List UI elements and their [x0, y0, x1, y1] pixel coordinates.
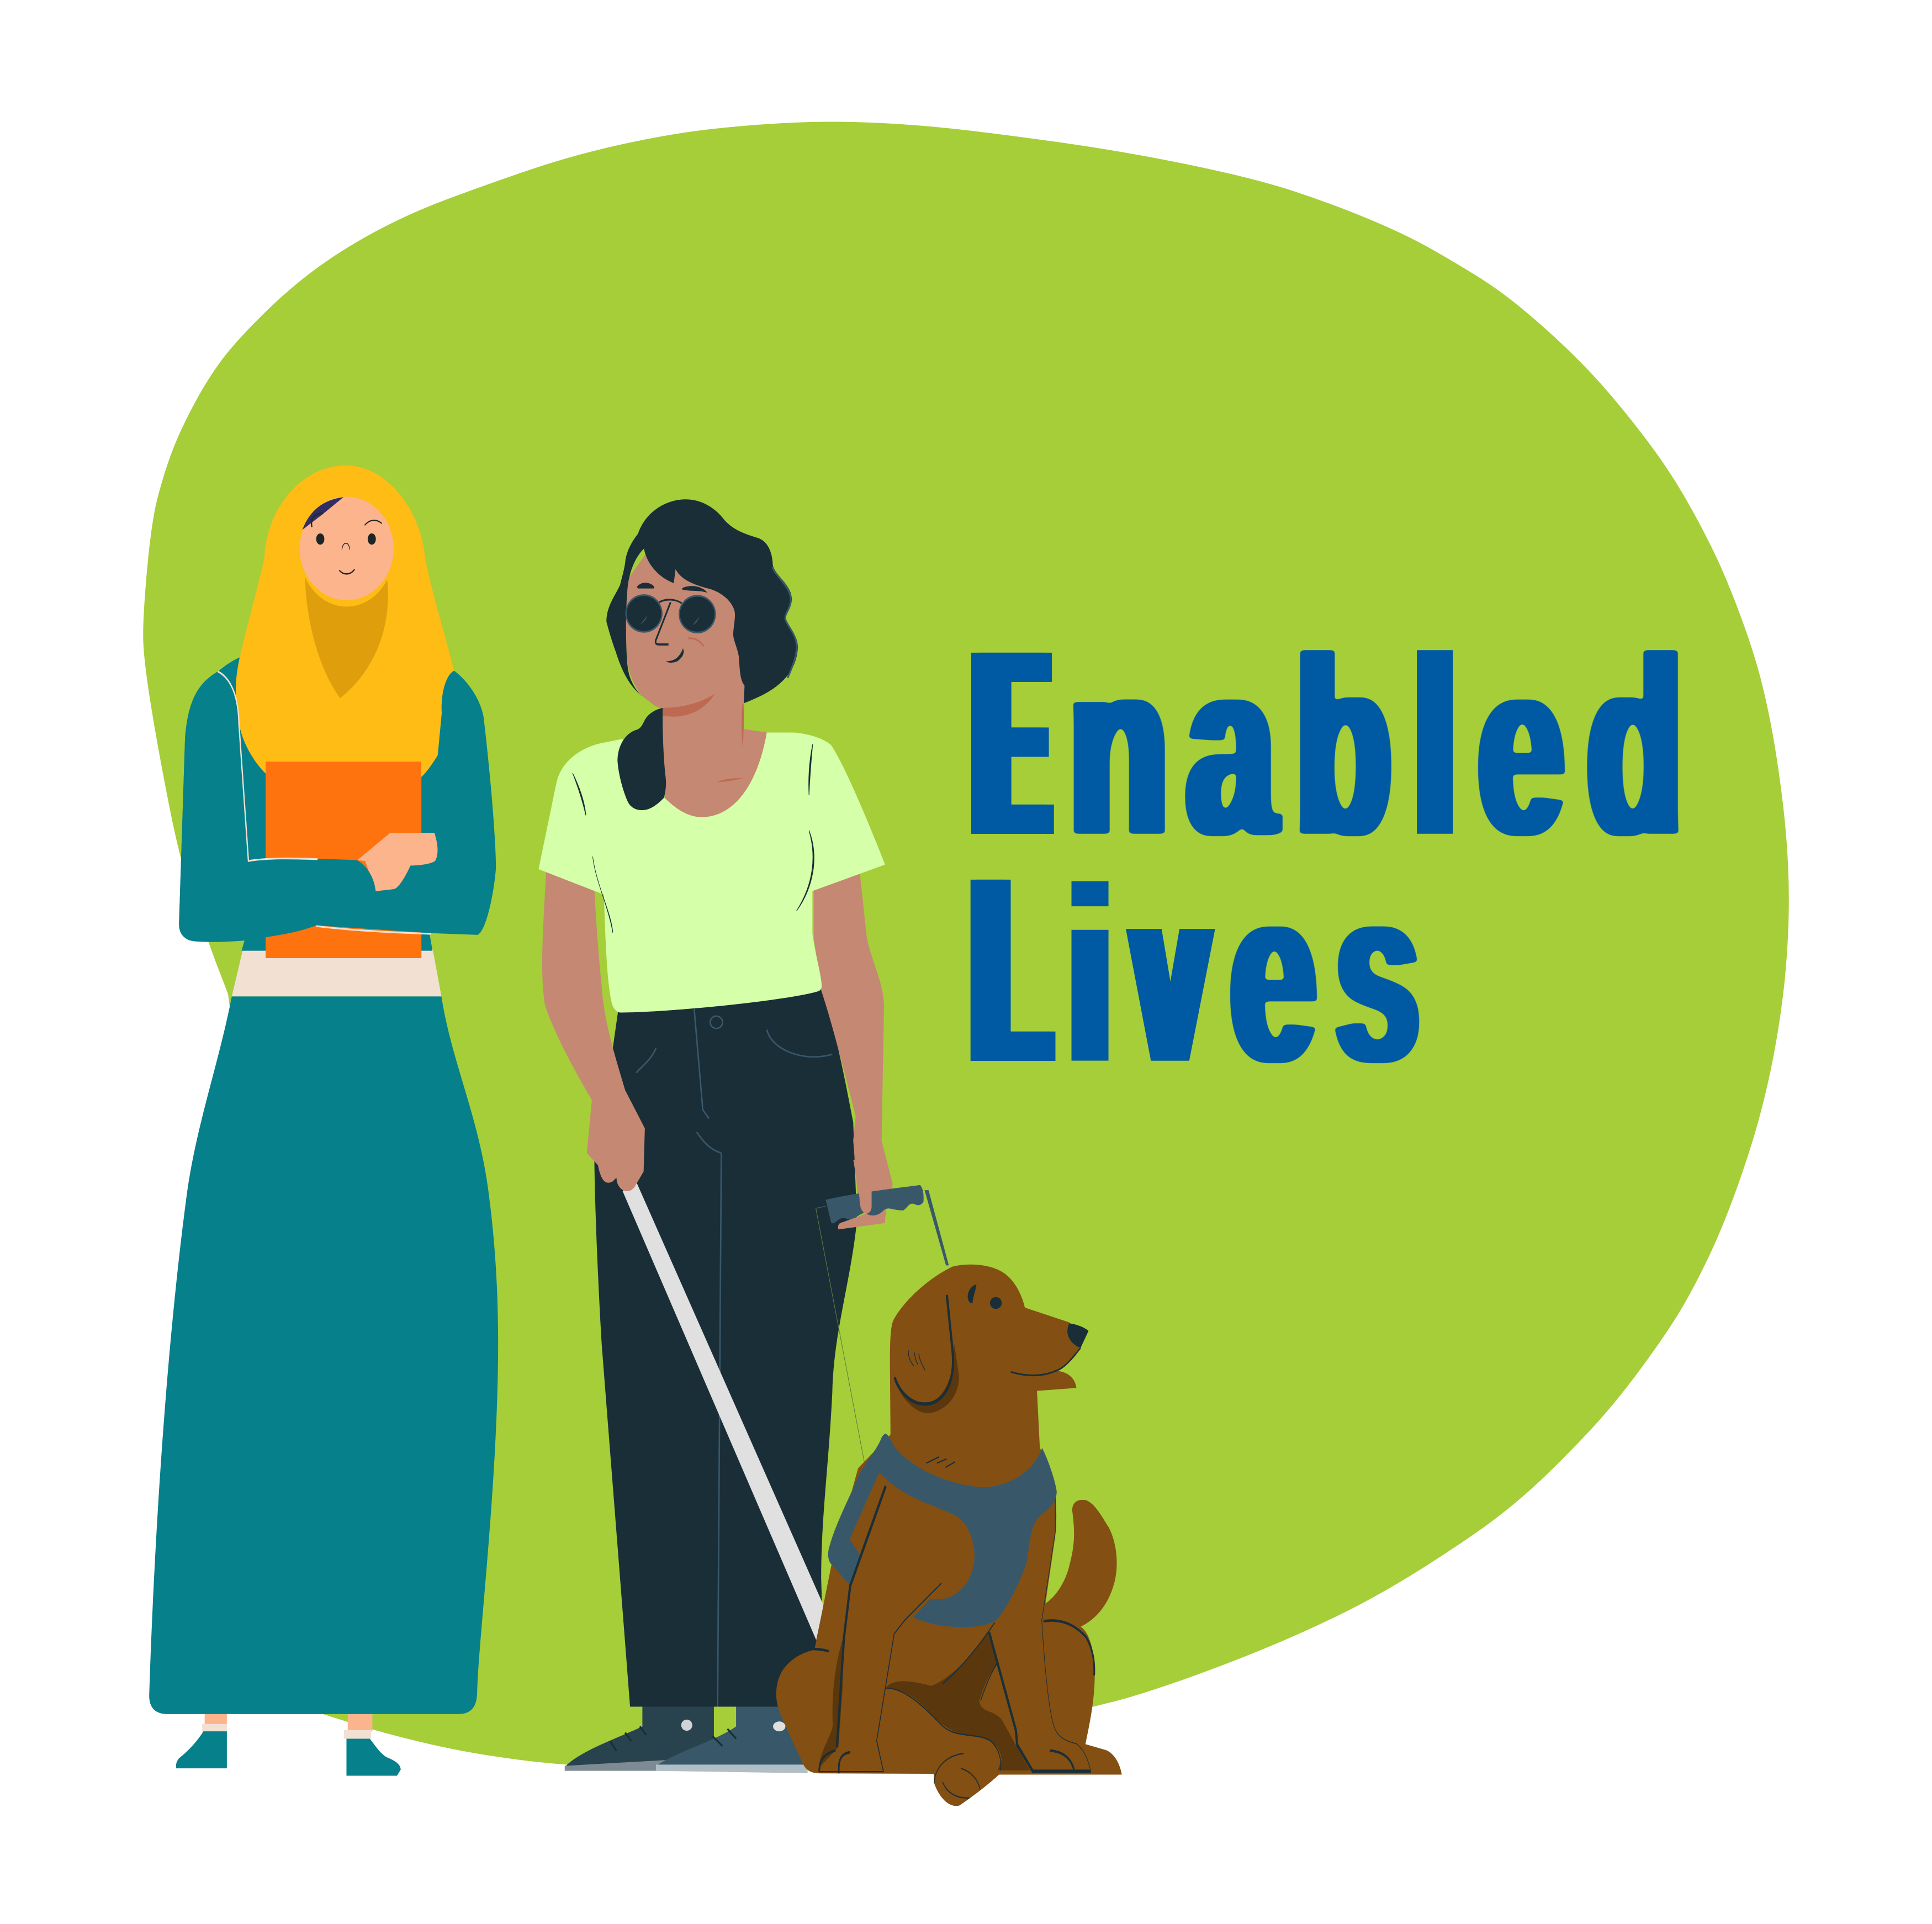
neck shadows [663, 694, 744, 782]
yellow hijab [236, 466, 454, 777]
figure: guide dog with harness [776, 1160, 1122, 1806]
sunglasses [626, 595, 715, 632]
trouser seams [636, 1009, 832, 1706]
dog leg outlines [814, 1486, 1094, 1798]
left foot [176, 1711, 227, 1768]
green t-shirt [538, 732, 885, 1013]
dark fur shading [819, 1341, 1030, 1770]
title line: Enabled: l [1416, 605, 1454, 888]
facial features [637, 583, 707, 663]
figure: woman in hijab holding a book [149, 466, 498, 1776]
white cane [623, 1179, 824, 1640]
title line: Enabled [971, 596, 1682, 890]
hair [606, 499, 798, 704]
title line: Enabled: d [1587, 605, 1682, 888]
crossed teal arms [179, 671, 496, 942]
title line: Enabled: b [1296, 605, 1391, 888]
fingers over handle [853, 1160, 892, 1214]
harness vest [828, 1434, 1057, 1627]
woman upper body [179, 466, 496, 958]
fingertips over sleeve [407, 833, 437, 865]
right foot [344, 1711, 401, 1776]
hijab face rim [300, 496, 394, 606]
title line: Enabled: n [1070, 609, 1168, 887]
figure: blind woman with cane [538, 499, 893, 1773]
title line: Lives: e [1230, 836, 1316, 1114]
upper body [538, 499, 885, 1013]
rear hair lock [617, 708, 666, 810]
right arm [814, 869, 893, 1202]
long teal skirt [149, 996, 498, 1714]
hijab shadow [305, 575, 388, 698]
title line: Lives: v [1134, 836, 1208, 1114]
dark trousers [594, 986, 857, 1706]
title line: Lives: s [1336, 836, 1419, 1114]
title line: Lives: i [1071, 837, 1110, 1114]
dog body [776, 1265, 1122, 1806]
beige waist band [232, 949, 441, 996]
woman lower body [149, 949, 498, 1776]
face and neck [626, 539, 767, 817]
title line: Enabled: e [1479, 609, 1564, 887]
title line: Lives [971, 823, 1420, 1117]
shirt creases [573, 744, 814, 933]
title: Enabled Lives [971, 596, 1682, 1117]
palm under handle [838, 1206, 886, 1229]
left arm and hand [542, 870, 645, 1191]
title line: Enabled: a [1187, 609, 1275, 887]
harness handle [816, 1185, 949, 1462]
hair highlight [772, 567, 797, 678]
hand on book [357, 833, 437, 891]
dog face details [894, 1285, 1088, 1467]
face [300, 496, 394, 600]
title line: Lives: L [971, 823, 1045, 1117]
teal torso [179, 657, 484, 951]
green blob background [143, 121, 1789, 1769]
orange book [266, 762, 421, 958]
shoes [565, 1706, 808, 1773]
sleeve outline [218, 672, 431, 934]
title line: Enabled: E [973, 596, 1041, 890]
